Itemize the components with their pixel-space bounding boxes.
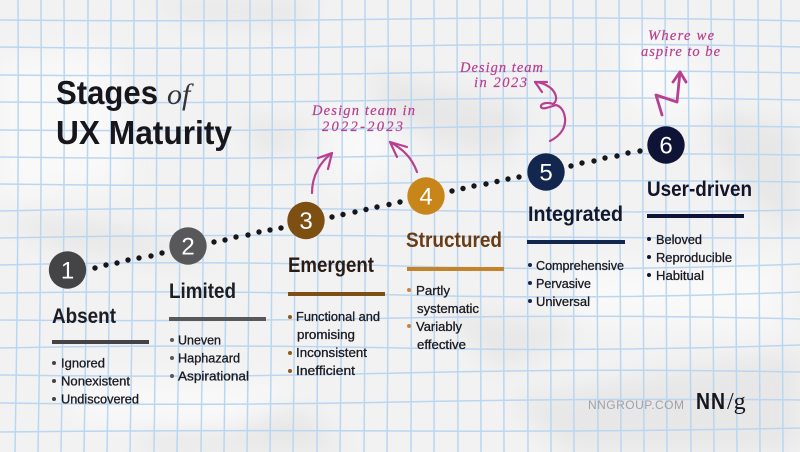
stage 2 badge [169, 227, 207, 265]
stage 1 heading: Absent [52, 304, 116, 328]
stage 3 badge: 3 [299, 208, 313, 235]
stage 5 badge: 5 [539, 160, 553, 186]
arrow: from stage 4 [390, 142, 417, 172]
stage 3 list [288, 310, 380, 378]
stage 2 heading: Limited [169, 279, 236, 303]
stage 6 badge [647, 126, 685, 164]
annotation: where we aspire to be [641, 28, 721, 60]
title: Stages [56, 74, 158, 111]
stage 2 list: Aspirational [178, 370, 249, 384]
title [56, 74, 233, 151]
stage 1 list: Nonexistent [61, 374, 131, 388]
website credit: NNGROUP.COM [588, 398, 684, 412]
stage 6 list: Reproducible [656, 251, 732, 265]
stage 5 rule [527, 240, 625, 244]
stage 5: Integrated [527, 153, 625, 309]
stage 5 heading: Integrated [528, 202, 623, 226]
dotted progress line [92, 148, 643, 271]
stage 1 list: Undiscovered [61, 392, 139, 406]
stage 3 rule [288, 292, 385, 296]
stage 4 badge [407, 177, 445, 215]
stage 3: Emergent [287, 202, 385, 378]
stage 5 list: Pervasive [536, 277, 591, 291]
logo: NN/g: N [696, 388, 710, 414]
arrow: from stage 6 [656, 72, 686, 115]
stage 4 heading: Structured [406, 228, 502, 252]
stage 3 list: promising [297, 328, 355, 342]
stage 5 list: Comprehensive [536, 259, 624, 273]
stage 5 badge [527, 153, 565, 191]
stage 2 list: Haphazard [178, 352, 240, 366]
annotation: design team in 2022-2023: 2022-2023 [322, 119, 403, 135]
stage 4 list [407, 284, 479, 352]
logo: NN/g: N [711, 388, 725, 414]
stage 3 heading: Emergent [288, 253, 374, 277]
stage 3 badge [287, 202, 325, 239]
stage 6 list [647, 233, 732, 283]
title: UX Maturity [56, 114, 233, 151]
stage 1 rule [52, 340, 149, 344]
stage 4 rule [407, 267, 504, 271]
stage 2 list: Uneven [178, 334, 221, 348]
stage 1 badge: 1 [61, 258, 74, 284]
stage 5 list: Universal [536, 295, 590, 309]
stage 4 list: effective [417, 338, 466, 352]
stage 6: User-driven [647, 126, 752, 283]
stage 2 badge: 2 [181, 234, 195, 260]
stage 4: Structured [406, 177, 504, 352]
arrow: from stage 5 [535, 82, 565, 141]
annotation: design team in 2023: Design team [459, 60, 543, 76]
stage 4 list: Variably [416, 320, 463, 334]
title: of [167, 78, 194, 111]
annotation: design team in 2022-2023: Design team in [311, 103, 415, 119]
annotation: design team in 2022-2023 [311, 103, 415, 135]
stage 6 rule [647, 214, 744, 218]
stage 1 badge [49, 251, 86, 289]
annotation: design team in 2023 [459, 60, 543, 91]
stage 2: Limited [169, 227, 266, 384]
stage 6 list: Habitual [656, 269, 704, 283]
stage 6 badge: 6 [659, 132, 673, 160]
stage 2 list [170, 334, 249, 384]
stage 6 list: Beloved [656, 233, 702, 247]
logo: NN/g [696, 388, 746, 415]
stage 3 list: Inefficient [296, 364, 356, 378]
stage 1: Absent [49, 251, 149, 406]
stage 1 list [52, 356, 139, 406]
arrow: from stage 3 [312, 153, 332, 193]
stage 5 list [528, 259, 624, 309]
stage 3 list: Functional and [296, 310, 380, 324]
stage 4 list: systematic [417, 302, 479, 316]
annotation: where we aspire to be: Where we [648, 28, 715, 44]
annotation: design team in 2023: in 2023 [474, 75, 527, 91]
annotation: where we aspire to be: aspire to be [641, 44, 721, 60]
stage 3 list: Inconsistent [296, 346, 368, 360]
logo: NN/g: /g [727, 389, 746, 415]
stage 2 rule [169, 317, 266, 321]
stage 4 list: Partly [416, 284, 451, 298]
stage 4 badge: 4 [419, 184, 433, 210]
stage 1 list: Ignored [61, 356, 105, 370]
stage 6 heading: User-driven [647, 177, 752, 201]
